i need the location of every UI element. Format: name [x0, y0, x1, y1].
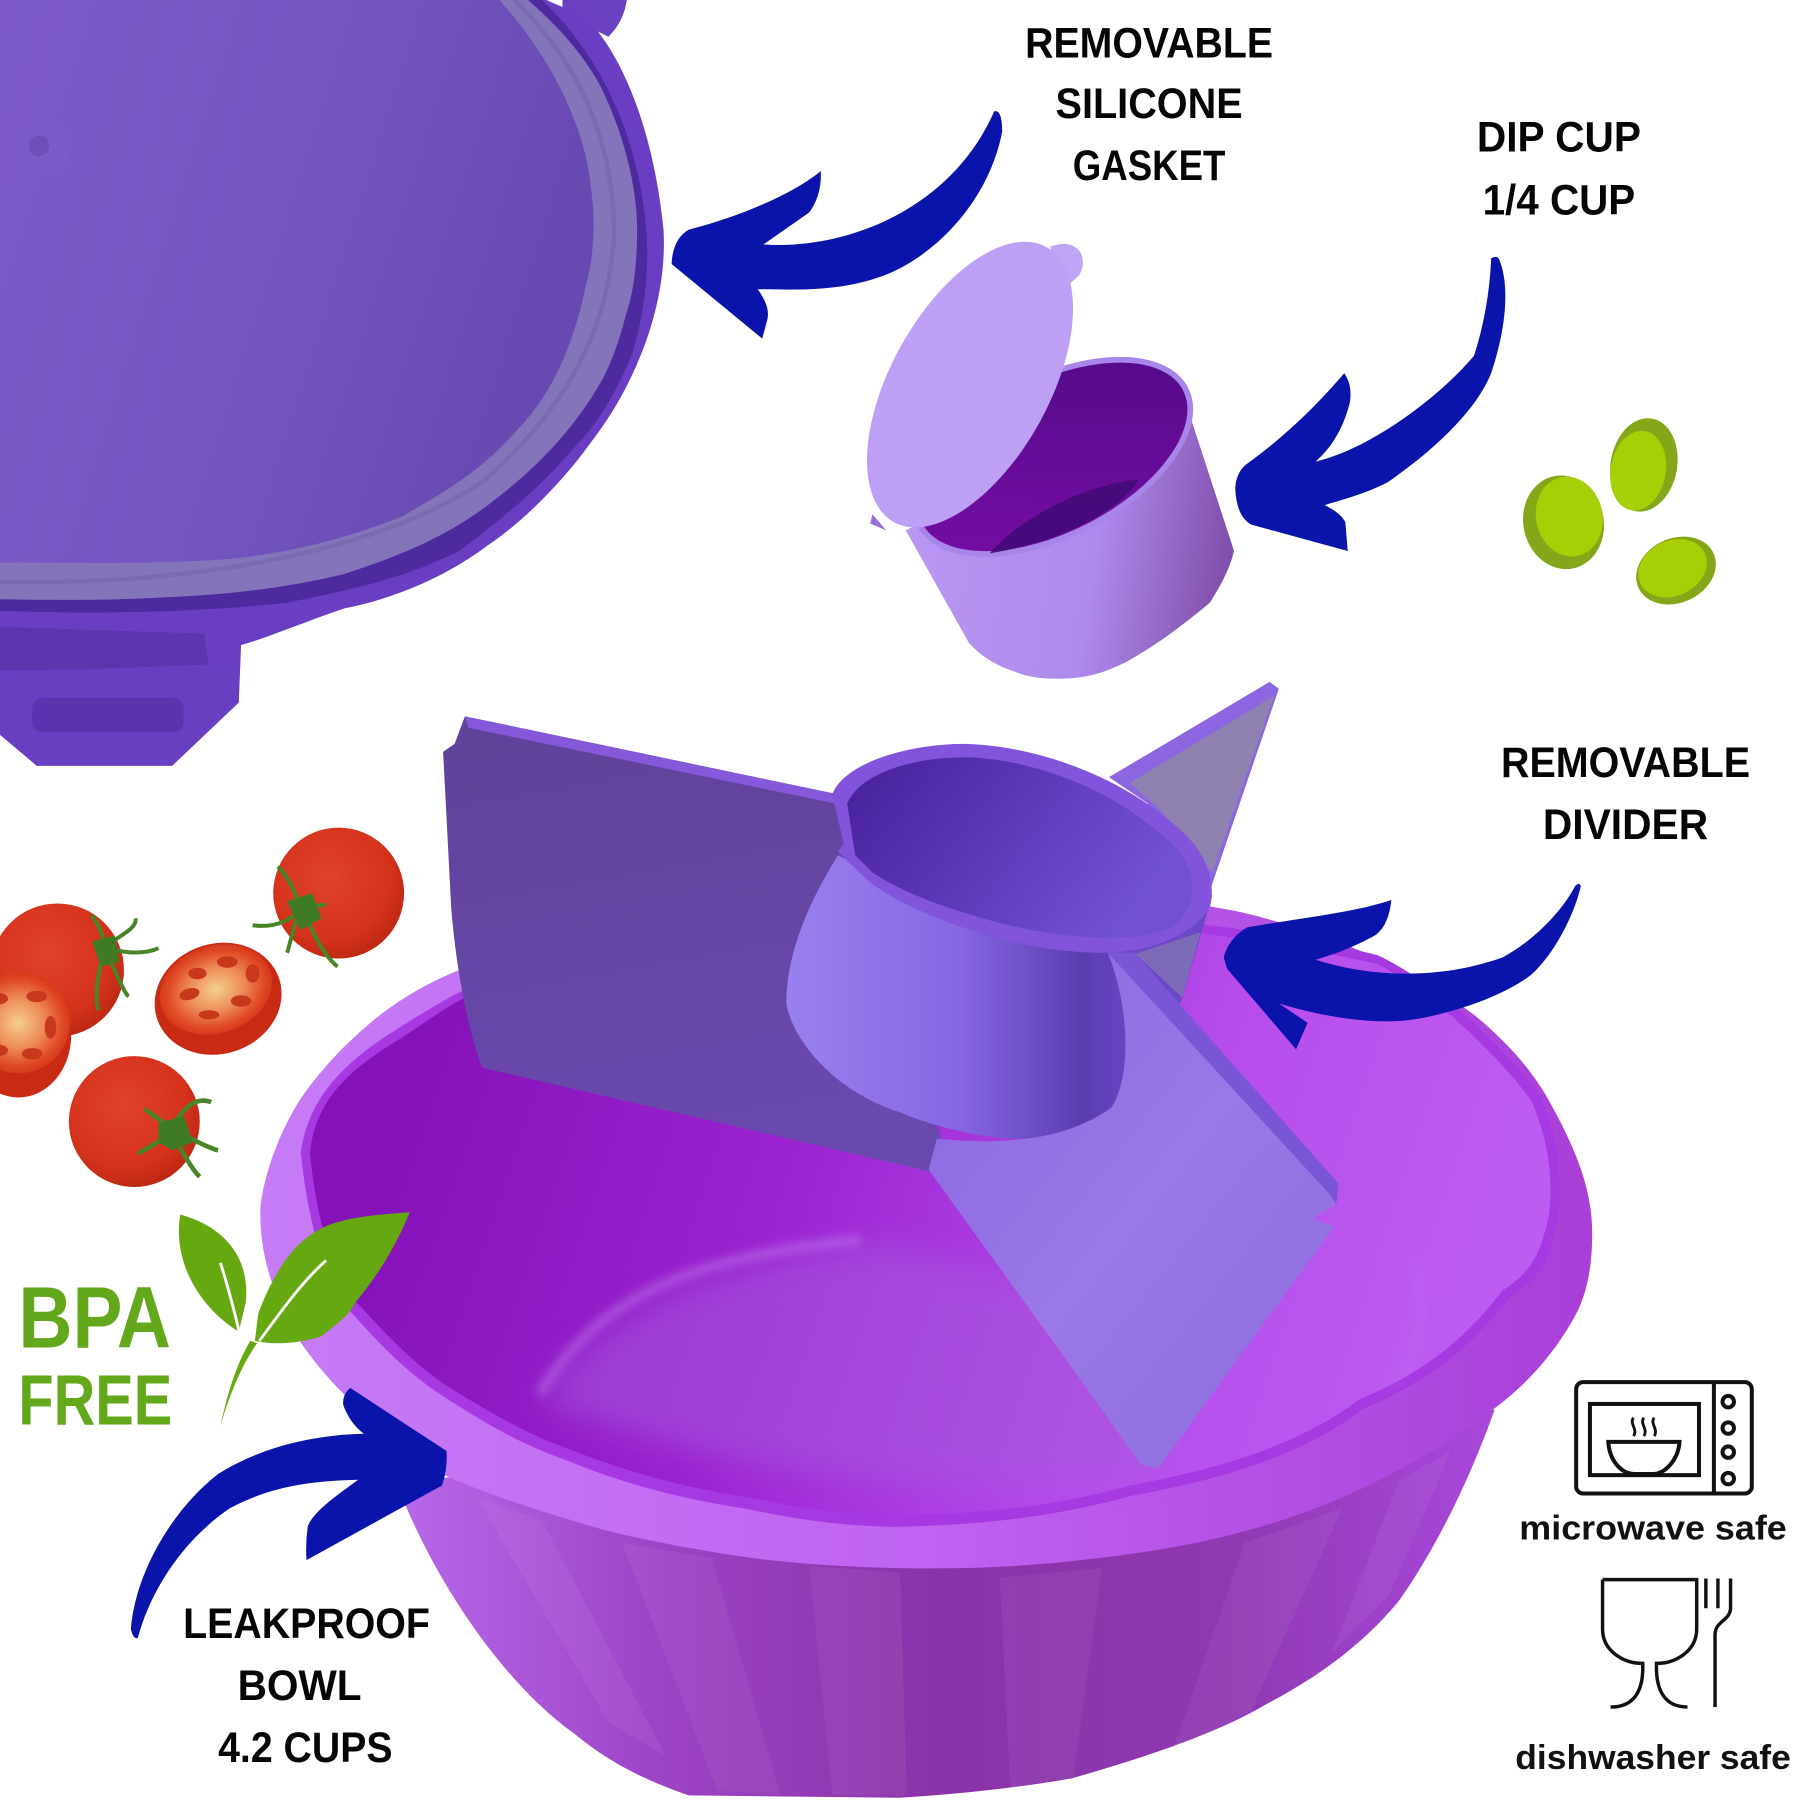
lid disc	[0, 0, 594, 563]
badge: BPA free	[18, 1212, 410, 1441]
text: microwave safe: microwave safe	[1519, 1509, 1787, 1547]
lid with silicone gasket	[0, 0, 664, 766]
BPA free text: BPA	[18, 1270, 171, 1367]
lid latch	[0, 627, 209, 670]
label: dip cup	[1477, 114, 1641, 224]
cup interior	[884, 320, 1221, 594]
arrow: silicone gasket	[672, 111, 1002, 339]
BPA free text	[18, 1270, 172, 1441]
removable divider	[443, 682, 1339, 1468]
divider cylinder rim and well	[832, 744, 1212, 953]
label: leakproof bowl: BOWL	[238, 1662, 362, 1709]
BPA free text: FREE	[18, 1362, 172, 1441]
icon: glass and fork	[1603, 1578, 1731, 1707]
divider front blade	[929, 953, 1339, 1468]
label: removable silicone gasket: REMOVABLE	[1025, 19, 1273, 66]
divider back panel	[1109, 682, 1279, 987]
dip cup with lid	[825, 209, 1234, 679]
bowl inner lip	[301, 910, 1560, 1527]
bowl ribbed body	[396, 1410, 1495, 1798]
label: removable silicone gasket: GASKET	[1073, 142, 1225, 189]
bowl rim	[260, 891, 1592, 1568]
bowl floor shading	[540, 1246, 1159, 1485]
label: dip cup: 1/4 CUP	[1483, 177, 1635, 224]
whole tomato, top right	[253, 828, 404, 967]
cut tomato, centre	[140, 926, 296, 1071]
decoration: cherry tomatoes	[0, 828, 404, 1187]
label: removable silicone gasket	[1025, 19, 1273, 189]
icon: green leaves	[179, 1212, 410, 1426]
label: leakproof bowl: LEAKPROOF	[183, 1600, 430, 1647]
arrow: removable divider	[1224, 884, 1581, 1049]
label: removable silicone gasket: SILICONE	[1056, 80, 1243, 127]
whole tomato, bottom	[69, 1056, 218, 1187]
arrow: dip cup	[1235, 257, 1505, 551]
label: leakproof bowl: 4.2 CUPS	[218, 1724, 393, 1771]
bowl interior	[310, 919, 1550, 1515]
decoration: green olives	[1514, 413, 1727, 617]
cup body	[906, 396, 1234, 679]
silicone gasket	[0, 0, 637, 600]
label: dip cup: DIP CUP	[1477, 114, 1641, 161]
whole tomato, left	[0, 903, 158, 1037]
label: removable divider: DIVIDER	[1543, 801, 1708, 848]
text: dishwasher safe: dishwasher safe	[1515, 1739, 1791, 1777]
divider left panel	[443, 716, 953, 1177]
bowl	[260, 891, 1592, 1798]
icon: microwave	[1576, 1382, 1752, 1493]
label: removable divider: REMOVABLE	[1501, 739, 1750, 786]
arrow: leakproof bowl	[131, 1388, 447, 1638]
cup lid	[1050, 244, 1083, 296]
cut tomato, far left	[0, 972, 71, 1097]
label: leakproof bowl	[183, 1600, 430, 1771]
divider cylinder wall	[786, 855, 1212, 1139]
label: removable divider	[1501, 739, 1750, 848]
